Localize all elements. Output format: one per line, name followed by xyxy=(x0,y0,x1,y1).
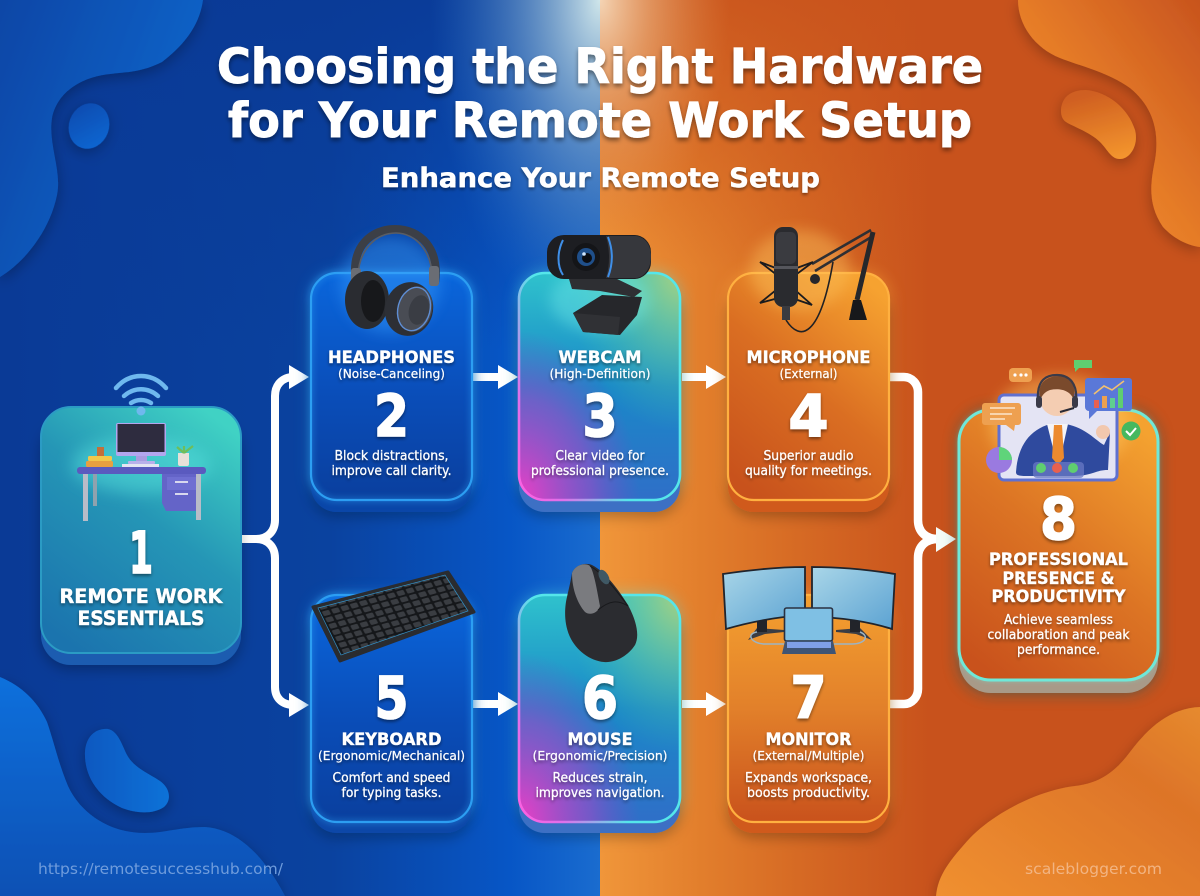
icon: ergonomic mouse xyxy=(565,564,637,662)
decorative blob: top left small xyxy=(62,98,116,154)
illustration: professional on video call xyxy=(982,360,1140,480)
description xyxy=(332,771,450,801)
heading: MONITOR xyxy=(766,730,852,750)
heading: (Noise-Canceling) xyxy=(338,366,445,381)
icon: dual monitors with laptop xyxy=(723,567,895,654)
heading: KEYBOARD xyxy=(342,730,442,750)
decorative blob: top right xyxy=(1018,0,1200,247)
panel: card 7 monitor xyxy=(723,567,895,833)
description: Block distractions, xyxy=(334,449,448,464)
description xyxy=(332,449,452,479)
description: Clear video for xyxy=(556,449,645,464)
subtitle: Enhance Your Remote Setup xyxy=(381,163,820,194)
icon: wifi signal xyxy=(116,376,166,416)
description: collaboration and peak xyxy=(988,628,1130,643)
heading: (External/Multiple) xyxy=(752,748,864,763)
title xyxy=(217,39,983,149)
description: Comfort and speed xyxy=(332,771,450,786)
panel: card 1 remote work essentials xyxy=(41,376,241,665)
footer: brand: scaleblogger.com xyxy=(1025,860,1162,878)
panel: card 4 microphone xyxy=(728,227,889,512)
icon: keyboard xyxy=(313,572,474,661)
description: improves navigation. xyxy=(536,786,664,801)
title: for Your Remote Work Setup xyxy=(228,93,972,149)
heading: MICROPHONE xyxy=(746,348,870,368)
description: for typing tasks. xyxy=(342,786,442,801)
heading: PROFESSIONAL xyxy=(989,550,1128,570)
heading: MOUSE xyxy=(568,730,632,750)
description: Superior audio xyxy=(764,449,854,464)
description: boosts productivity. xyxy=(747,786,870,801)
heading xyxy=(328,348,455,381)
heading: (Ergonomic/Mechanical) xyxy=(318,748,465,763)
description: professional presence. xyxy=(531,464,669,479)
heading: REMOTE WORK xyxy=(60,585,223,608)
description xyxy=(745,449,872,479)
connector: 4 and 7 into card 8 xyxy=(889,377,956,704)
heading: HEADPHONES xyxy=(328,348,455,368)
heading xyxy=(989,550,1128,607)
description: Achieve seamless xyxy=(1004,613,1113,628)
arrow: 6 to 7 xyxy=(682,692,726,716)
heading xyxy=(60,585,223,630)
icon: desk with computer xyxy=(71,423,211,521)
heading: ESSENTIALS xyxy=(78,607,204,630)
heading: (Ergonomic/Precision) xyxy=(532,748,668,763)
step number 5: 5 xyxy=(374,664,408,732)
description: Expands workspace, xyxy=(745,771,872,786)
panel: card 6 mouse xyxy=(519,564,680,833)
decorative blob: bottom right xyxy=(936,707,1200,896)
step number 1: 1 xyxy=(129,519,153,587)
description: performance. xyxy=(1017,643,1100,658)
heading xyxy=(532,730,668,763)
step number 7: 7 xyxy=(790,664,826,732)
step number 2: 2 xyxy=(374,382,409,450)
heading: (External) xyxy=(780,366,838,381)
panel: card 3 webcam xyxy=(519,235,680,512)
heading: PRODUCTIVITY xyxy=(992,587,1126,607)
heading xyxy=(318,730,465,763)
description: quality for meetings. xyxy=(745,464,872,479)
description xyxy=(536,771,664,801)
decorative blob: bottom left xyxy=(0,677,285,896)
description: Reduces strain, xyxy=(552,771,648,786)
step number 6: 6 xyxy=(582,664,618,732)
decorative blob: bottom left small xyxy=(85,729,169,812)
step number 4: 4 xyxy=(788,382,828,450)
description xyxy=(745,771,872,801)
heading xyxy=(550,348,650,381)
step number 3: 3 xyxy=(582,382,618,450)
footer: source url: https://remotesuccesshub.com/ xyxy=(38,860,284,878)
heading xyxy=(746,348,870,381)
heading xyxy=(752,730,864,763)
heading: WEBCAM xyxy=(558,348,642,368)
heading: PRESENCE & xyxy=(1002,569,1115,589)
icon: webcam xyxy=(547,235,651,335)
step number 8: 8 xyxy=(1040,485,1077,553)
heading: (High-Definition) xyxy=(550,366,650,381)
icon: headphones xyxy=(340,229,440,341)
description xyxy=(988,613,1130,658)
description xyxy=(531,449,669,479)
decorative blob: top left xyxy=(0,0,203,277)
arrow: 2 to 3 xyxy=(473,365,518,389)
title: Choosing the Right Hardware xyxy=(217,39,983,95)
icon: microphone on boom arm xyxy=(750,227,873,332)
arrow: 3 to 4 xyxy=(682,365,726,389)
panel: card 8 professional presence and productivity xyxy=(959,360,1158,693)
panel: card 5 keyboard xyxy=(311,572,474,833)
description: improve call clarity. xyxy=(332,464,452,479)
panel: card 2 headphones xyxy=(311,229,472,512)
decorative blob: top right small xyxy=(1061,90,1136,159)
connector: brace from card 1 to cards 2 and 5 xyxy=(241,365,309,717)
arrow: 5 to 6 xyxy=(473,692,518,716)
